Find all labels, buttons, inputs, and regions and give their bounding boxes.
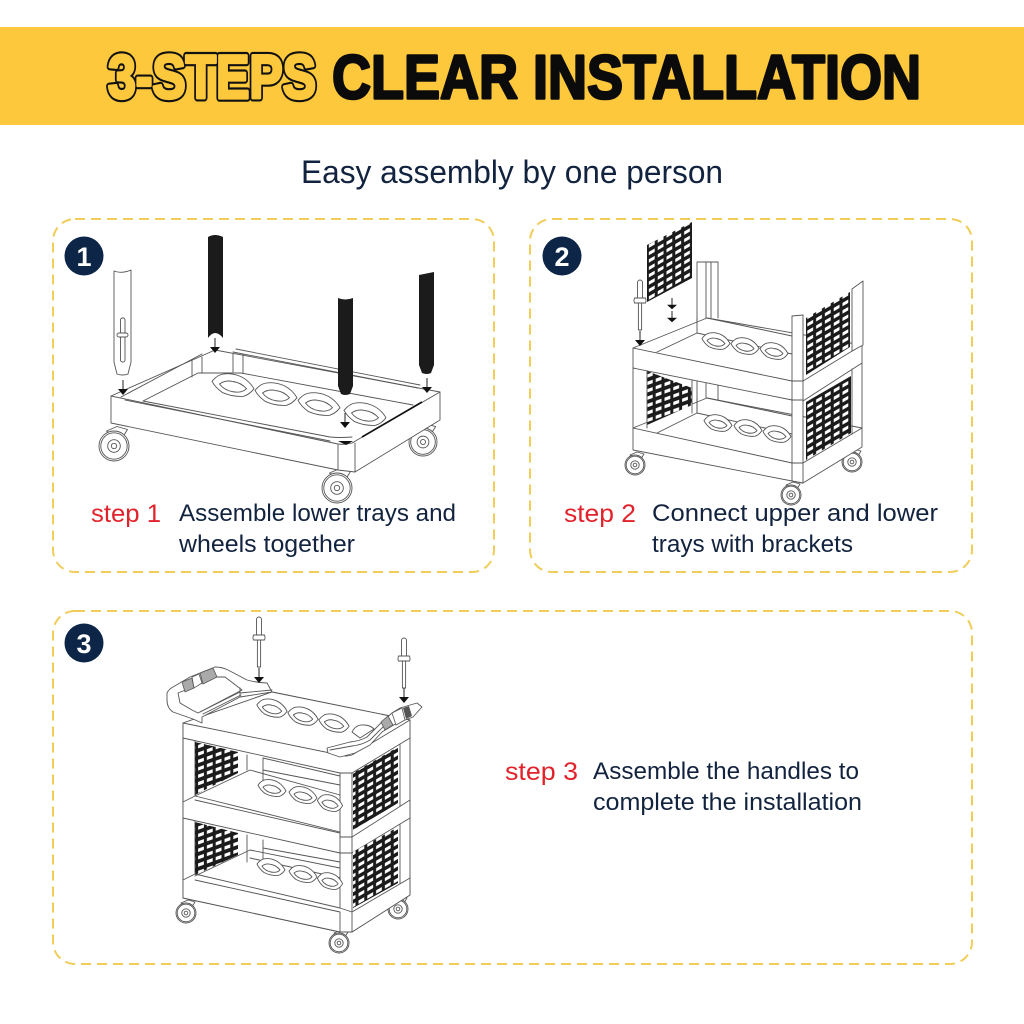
step 1 text (178, 500, 456, 558)
falling bracket panel (647, 222, 692, 302)
right bracket panels (806, 292, 851, 460)
panel: step 1 (53, 219, 494, 572)
left handle (167, 667, 272, 723)
step 3 text: complete the installation (593, 789, 862, 816)
badge 2 (542, 236, 582, 276)
step 3 text (593, 758, 862, 816)
pin (634, 280, 646, 330)
step 3 text: Assemble the handles to (593, 758, 859, 785)
illustration: two tier tray with brackets (625, 222, 863, 505)
step 2 text: trays with brackets (652, 531, 853, 558)
arrows (635, 298, 677, 346)
badge 3 (64, 624, 104, 662)
back post and upper tray (697, 262, 718, 334)
badge 3: 3 (76, 629, 92, 659)
bottom tier (183, 874, 410, 932)
badge 2: 2 (554, 242, 570, 272)
middle tier (183, 796, 410, 853)
step 2 text: Connect upper and lower (652, 500, 938, 527)
step 1 text: Assemble lower trays and (179, 500, 456, 527)
subtitle: Easy assembly by one person (301, 154, 723, 190)
arrows (118, 338, 432, 428)
lower tray (633, 398, 862, 483)
title outlined: 3-STEPS: 3-STEPS (108, 43, 316, 111)
illustration: lower tray with legs and wheels (99, 235, 440, 503)
top tier (183, 692, 410, 773)
panel: step 3 (53, 611, 972, 964)
black leg front (338, 298, 353, 395)
badge 1: 1 (76, 242, 92, 272)
badge 1 (64, 236, 104, 276)
white leg with pin (114, 270, 131, 375)
step 3 label: step 3 (505, 758, 578, 786)
side panels (195, 742, 398, 908)
right side posts (792, 281, 863, 483)
step 1 label: step 1 (91, 500, 161, 528)
arrows (254, 668, 409, 703)
panel: step 2 (530, 219, 972, 572)
black leg back (208, 235, 223, 338)
right handle (327, 703, 422, 757)
step 2 text (652, 500, 938, 558)
title banner (0, 27, 1024, 125)
step 1 text: wheels together (178, 531, 355, 558)
pins (253, 617, 410, 688)
title solid: CLEAR INSTALLATION: CLEAR INSTALLATION (332, 44, 921, 112)
step 2 label: step 2 (564, 500, 636, 528)
black leg right (419, 272, 434, 374)
title outlined: 3-STEPS: 3-STEPS (108, 43, 316, 111)
illustration: complete three tier cart (167, 617, 422, 953)
